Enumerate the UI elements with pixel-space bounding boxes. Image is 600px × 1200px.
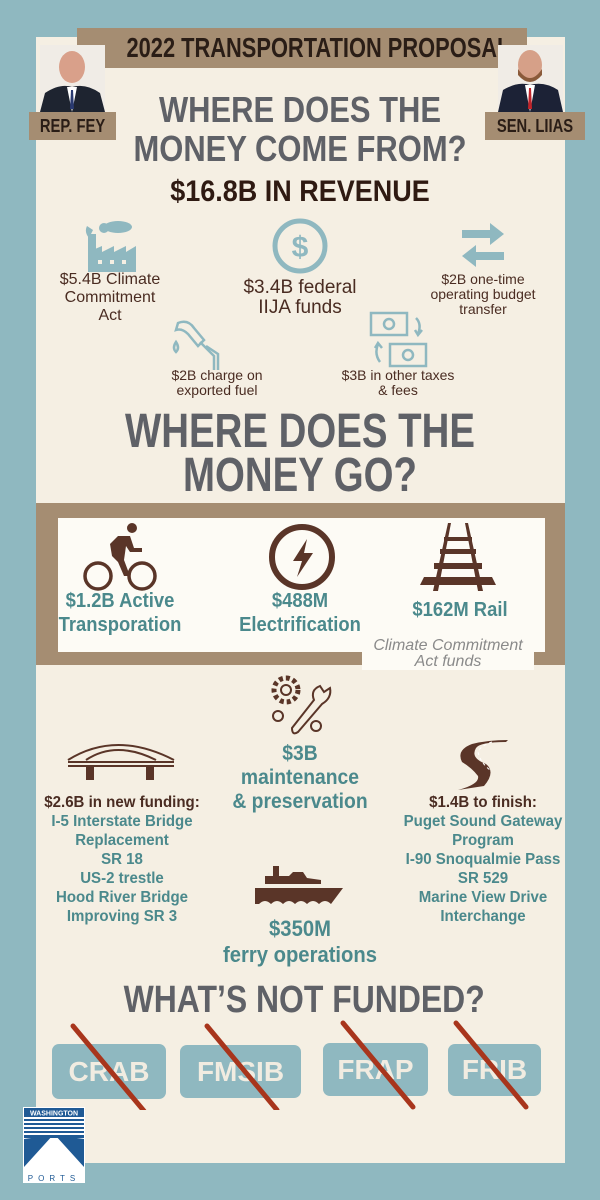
text: electrification: $488M	[272, 590, 328, 612]
heading: where does money go	[125, 405, 475, 502]
icon: dollar: $	[292, 231, 309, 264]
text: active transportation: $1.2B Active	[66, 590, 174, 612]
heading: where does money come from	[133, 89, 467, 169]
text: active transportation	[58, 590, 181, 636]
label: Sen. Liias	[485, 112, 585, 140]
label: Sen. Liias: SEN. LIIAS	[497, 116, 573, 136]
logo: Washington Ports: WASHINGTON	[30, 1110, 78, 1118]
text: finish list: Marine View Drive	[419, 889, 547, 906]
text: ferry operations: $350M	[269, 916, 331, 941]
text: finish list: SR 529	[458, 870, 508, 887]
text: exported fuel: exported fuel	[177, 382, 257, 398]
title banner: 2022 TRANSPORTATION PROPOSAL	[126, 32, 510, 63]
panel: climate commitment act funds	[36, 503, 565, 665]
text: new funding list: $2.6B in new funding:	[44, 794, 200, 811]
text: other taxes	[342, 367, 454, 398]
text: maintenance: maintenance	[241, 766, 359, 789]
text: maintenance: $3B	[282, 742, 318, 765]
text: maintenance: & preservation	[232, 790, 368, 813]
text: operating budget transfer: transfer	[459, 301, 507, 317]
label: CCA funds: Act funds	[415, 653, 481, 670]
icon: factory	[86, 221, 136, 272]
heading: where does money come from: WHERE DOES THE	[159, 89, 441, 130]
item: FRAP: FRAP	[337, 1054, 414, 1085]
text: operating budget transfer: operating budget	[430, 286, 536, 302]
text: federal IIJA: IIJA funds	[258, 297, 342, 318]
text: finish list: Program	[452, 832, 514, 849]
logo: Washington Ports	[23, 1107, 85, 1183]
icon: road	[458, 740, 508, 790]
text: new funding list: Hood River Bridge	[56, 889, 188, 906]
text: exported fuel	[171, 367, 263, 398]
item: CRAB: CRAB	[69, 1056, 149, 1087]
text: new funding list: Replacement	[75, 832, 169, 849]
text: federal IIJA: $3.4B federal	[243, 277, 357, 298]
text: finish list: I-90 Snoqualmie Pass	[406, 851, 560, 868]
text: finish list: Interchange	[440, 908, 526, 925]
item: FMSIB	[180, 1045, 301, 1098]
icon: rail	[420, 523, 496, 591]
not funded items	[52, 1020, 541, 1110]
text: electrification: Electrification	[239, 614, 361, 636]
text: new funding list	[44, 794, 200, 925]
text: climate commitment act	[60, 271, 160, 324]
heading: what's not funded: WHAT’S NOT FUNDED?	[124, 979, 485, 1021]
icon: electrification	[269, 524, 335, 590]
label: Rep. Fey	[29, 112, 116, 140]
item: FRIB: FRIB	[462, 1054, 527, 1085]
text: climate commitment act: Commitment	[65, 289, 155, 306]
text: federal IIJA	[243, 277, 357, 318]
text: finish list	[404, 794, 562, 925]
text: climate commitment act: $5.4B Climate	[60, 271, 160, 288]
item: FRIB	[448, 1044, 541, 1096]
icon: fuel nozzle	[172, 320, 220, 370]
icon: transfer arrows	[462, 223, 504, 267]
text: rail: $162M Rail	[412, 599, 508, 621]
text: operating budget transfer	[430, 271, 536, 317]
text: finish list: $1.4B to finish:	[429, 794, 537, 811]
heading: where does money come from: MONEY COME FROM?	[133, 128, 467, 169]
logo: Washington Ports: PORTS	[28, 1174, 80, 1183]
text: other taxes: $3B in other taxes	[342, 367, 454, 383]
text: operating budget transfer: $2B one-time	[441, 271, 525, 287]
text: ferry operations	[223, 916, 377, 967]
text: exported fuel: $2B charge on	[171, 367, 263, 383]
text: climate commitment act: Act	[98, 307, 122, 324]
item: FMSIB: FMSIB	[197, 1056, 284, 1087]
icon: bicycle	[83, 523, 157, 591]
text: new funding list: Improving SR 3	[67, 908, 177, 925]
heading: where does money go: WHERE DOES THE	[125, 405, 475, 458]
item: FRAP	[323, 1043, 428, 1096]
text: new funding list: US-2 trestle	[80, 870, 164, 887]
icon: ferry	[255, 866, 343, 904]
text: electrification	[239, 590, 361, 636]
text: active transportation: Transporation	[59, 614, 181, 636]
text: new funding list: I-5 Interstate Bridge	[51, 813, 193, 830]
heading: where does money go: MONEY GO?	[183, 449, 417, 502]
title banner	[77, 28, 527, 68]
label: CCA funds: Climate Commitment	[373, 637, 523, 654]
icon: gears and wrench	[272, 676, 332, 734]
label: Rep. Fey: REP. FEY	[40, 116, 105, 136]
photo: Rep. Fey	[40, 45, 105, 112]
text: ferry operations: ferry operations	[223, 942, 377, 967]
text: finish list: Puget Sound Gateway	[404, 813, 562, 830]
text: other taxes: & fees	[378, 382, 418, 398]
icon: dollar	[272, 218, 328, 274]
photo: Sen. Liias	[498, 45, 563, 112]
icon: bridge	[68, 744, 174, 780]
text: maintenance	[232, 742, 368, 813]
strike lines	[70, 1020, 528, 1110]
item: CRAB	[52, 1044, 166, 1099]
label: CCA funds	[362, 638, 534, 670]
revenue total: $16.8B IN REVENUE	[170, 175, 430, 208]
text: new funding list: SR 18	[101, 851, 143, 868]
icon: money exchange	[370, 312, 428, 368]
